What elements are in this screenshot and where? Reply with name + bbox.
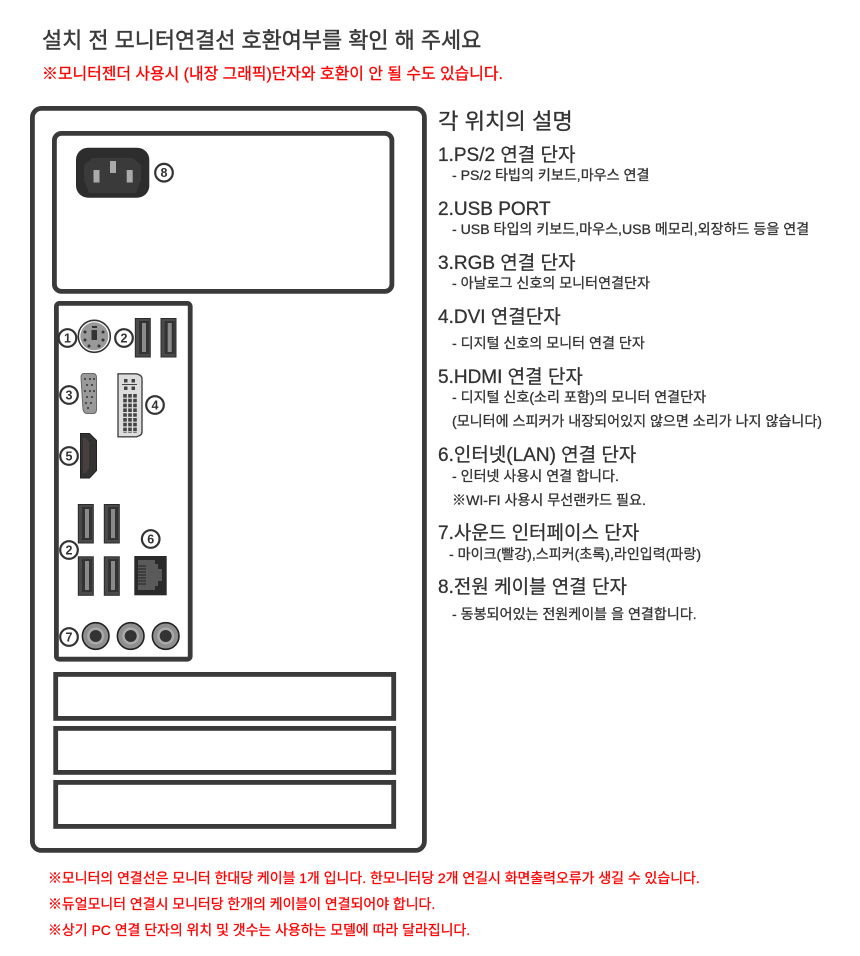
- label 4: 4: [152, 398, 159, 412]
- item 1 heading: 1.PS/2 연결 단자: [438, 145, 576, 166]
- item 5 heading: 5.HDMI 연결 단자: [438, 367, 583, 388]
- expansion slot 2: [56, 728, 394, 772]
- icon: USB ports top: [135, 318, 176, 357]
- item 3 heading: 3.RGB 연결 단자: [438, 253, 576, 274]
- footer note 3: ※상기 PC 연결 단자의 위치 및 갯수는 사용하는 모델에 따라 달라집니다.: [48, 922, 470, 938]
- legend heading: 각 위치의 설명: [438, 109, 573, 134]
- label 3: [60, 386, 78, 404]
- expansion slot 3: [56, 782, 394, 826]
- icon: USB ports bottom: [78, 504, 119, 595]
- footer note 1: ※모니터의 연결선은 모니터 한대당 케이블 1개 입니다. 한모니터당 2개 연길시 화면출력오류가 생길 수 있습니다.: [48, 870, 700, 886]
- icon: PS/2 port: [78, 320, 110, 352]
- title: 설치 전 모니터연결선 호환여부를 확인 해 주세요: [42, 28, 481, 53]
- I/O panel: [56, 303, 190, 659]
- icon: audio jacks: [82, 623, 179, 649]
- footer note 2: ※듀얼모니터 연결시 모니터당 한개의 케이블이 연결되어야 합니다.: [48, 896, 435, 912]
- label 7: 7: [66, 630, 73, 644]
- label 5: 5: [66, 449, 73, 463]
- expansion slot 1: [56, 674, 394, 718]
- icon: DVI port: [118, 374, 142, 437]
- label 5: [60, 447, 78, 465]
- item 8 text: - 동봉되어있는 전원케이블 을 연결합니다.: [452, 606, 697, 622]
- item 4 heading: 4.DVI 연결단자: [438, 307, 561, 328]
- label 8: [155, 164, 173, 182]
- item 2 text: - USB 타입의 키보드,마우스,USB 메모리,외장하드 등을 연결: [452, 221, 809, 237]
- label 8: 8: [161, 166, 168, 180]
- item 3 text: - 아날로그 신호의 모니터연결단자: [452, 275, 650, 291]
- icon: VGA port: [81, 374, 96, 414]
- case outline: [32, 108, 424, 850]
- label 7: [60, 628, 78, 646]
- item 7 text: - 마이크(빨강),스피커(초록),라인입력(파랑): [449, 546, 701, 562]
- label 2 top: 2: [121, 331, 128, 345]
- item 1 text: - PS/2 타빕의 키보드,마우스 연결: [452, 167, 649, 183]
- item 5 note: (모니터에 스피커가 내장되어있지 않으면 소리가 나지 않습니다): [452, 413, 822, 429]
- item 6 heading: 6.인터넷(LAN) 연결 단자: [438, 445, 636, 466]
- label 2 top: [115, 329, 133, 347]
- item 2 heading: 2.USB PORT: [438, 199, 551, 220]
- label 1: [59, 329, 76, 347]
- item 8 heading: 8.전원 케이블 연결 단자: [438, 577, 627, 598]
- icon: HDMI port: [80, 434, 96, 478]
- item 4 text: - 디지털 신호의 모니터 연결 단자: [452, 335, 645, 351]
- item 6 text: - 인터넷 사용시 연결 합니다.: [452, 468, 619, 484]
- power supply panel: [54, 133, 392, 291]
- label 1: 1: [64, 331, 71, 345]
- warning subtitle: ※모니터젠더 사용시 (내장 그래픽)단자와 호환이 안 될 수도 있습니다.: [42, 66, 503, 83]
- item 5 text: - 디지털 신호(소리 포함)의 모니터 연결단자: [452, 389, 706, 405]
- icon: power socket: [76, 148, 149, 198]
- item 6 note: ※WI-FI 사용시 무선랜카드 필요.: [452, 492, 646, 508]
- label 2 bottom: [60, 541, 78, 559]
- item 7 heading: 7.사운드 인터페이스 단자: [438, 523, 639, 544]
- label 6: 6: [147, 532, 154, 546]
- label 3: 3: [66, 388, 73, 402]
- label 6: [142, 530, 160, 548]
- label 2 bottom: 2: [66, 543, 73, 557]
- label 4: [146, 396, 164, 414]
- icon: LAN port: [134, 556, 167, 595]
